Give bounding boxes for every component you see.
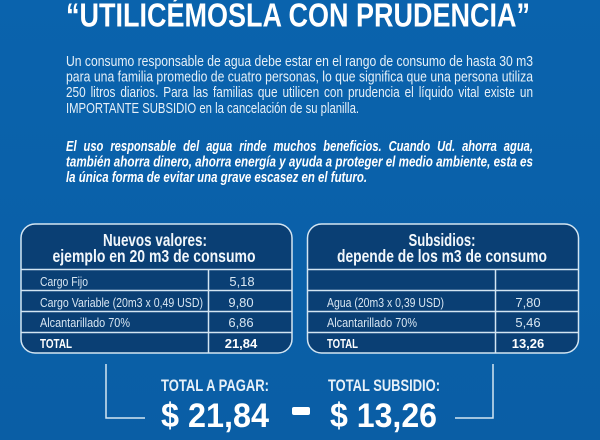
table rows: 6,86 (228, 315, 254, 330)
table rows: 5,46 (515, 315, 541, 330)
table heading: depende de los m3 de consumo (337, 246, 547, 266)
panel: nuevos valores table (21, 224, 292, 353)
panel: subsidios table (308, 224, 578, 353)
table heading (337, 230, 547, 266)
total subsidio: $ 13,26 (330, 397, 437, 435)
minus sign (292, 407, 310, 415)
table rows: Alcantarillado 70% (327, 315, 417, 330)
total subsidio (328, 377, 440, 435)
table rows: Agua (20m3 x 0,39 USD) (327, 295, 444, 310)
table rows (327, 295, 544, 351)
table rows: TOTAL (40, 337, 72, 351)
table heading: Nuevos valores: (103, 230, 207, 250)
table heading: ejemplo en 20 m3 de consumo (52, 246, 256, 266)
total a pagar (161, 377, 269, 435)
table rows: Alcantarillado 70% (40, 315, 130, 330)
table rows: 21,84 (225, 336, 258, 351)
table rows (40, 274, 258, 351)
bracket: right (455, 364, 493, 418)
text block: italic benefits paragraph (66, 139, 533, 186)
table rows: 5,18 (229, 274, 255, 289)
table rows: TOTAL (327, 337, 358, 351)
table rows: Cargo Fijo (40, 274, 88, 289)
table heading: Subsidios: (408, 230, 476, 250)
bracket: left (106, 364, 145, 418)
total subsidio: TOTAL SUBSIDIO: (328, 377, 440, 395)
table heading (52, 230, 256, 266)
table rows: 9,80 (228, 295, 254, 310)
table rows: Cargo Variable (20m3 x 0,49 USD) (40, 295, 203, 310)
table rows: 7,80 (515, 295, 541, 310)
text block: intro paragraph: IMPORTANTE SUBSIDIO en la cancelación de su planilla. (66, 101, 359, 117)
total a pagar: $ 21,84 (161, 397, 269, 435)
table rows: 13,26 (512, 336, 544, 351)
total a pagar: TOTAL A PAGAR: (161, 377, 269, 395)
text block: italic benefits paragraph: la única forma de evitar una grave escasez en el futuro. (66, 170, 367, 186)
text block: intro paragraph (66, 54, 534, 117)
